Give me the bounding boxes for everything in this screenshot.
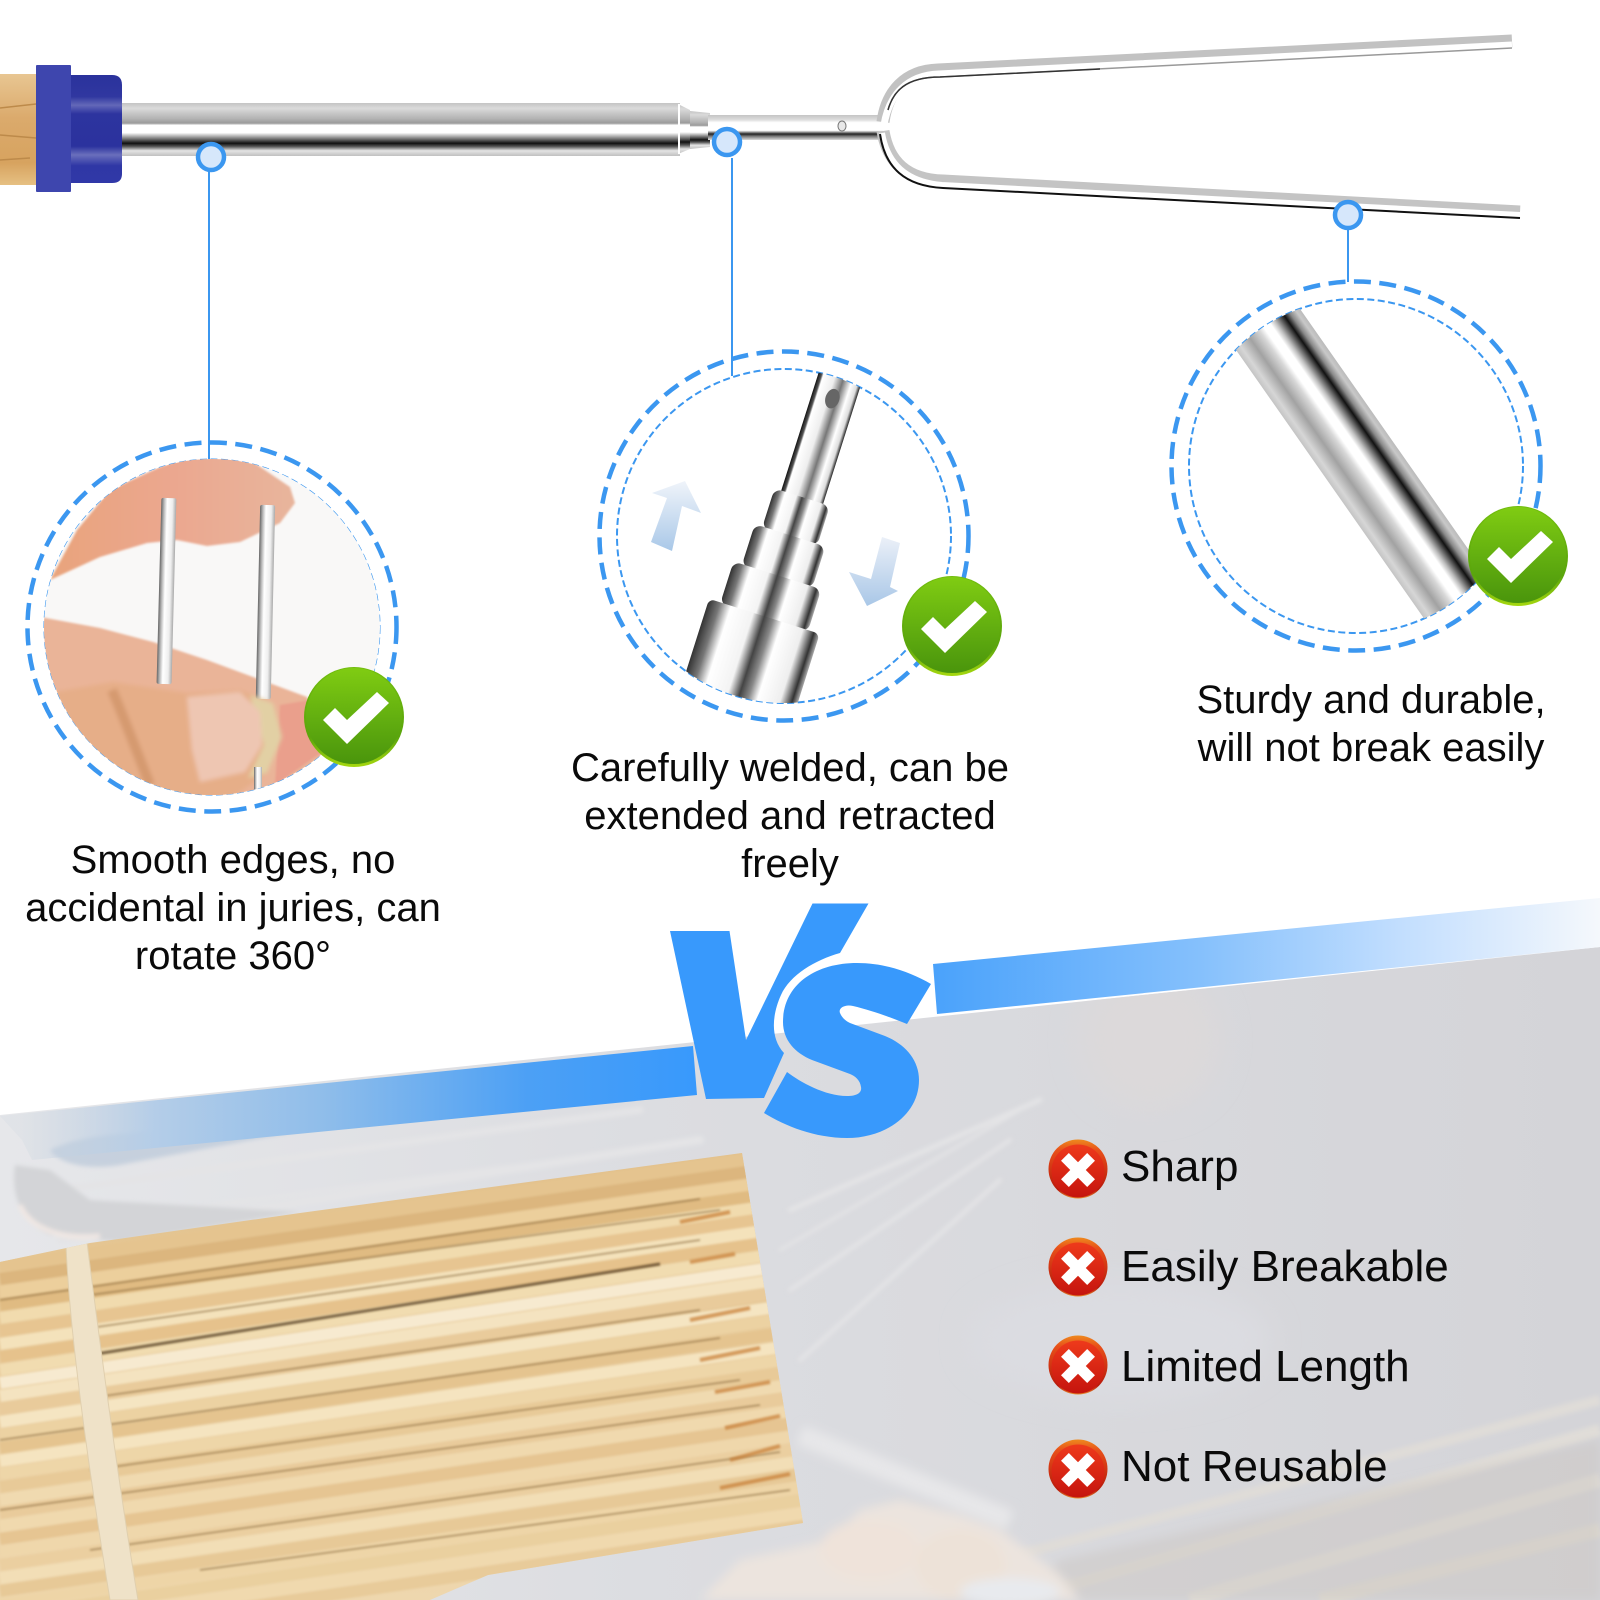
panel: smooth edges photo [28, 442, 404, 812]
white rule along the background edge [0, 945, 1600, 1113]
text: smooth edges: rotate 360° [135, 934, 331, 978]
text: carefully welded: Carefully welded, can be [571, 746, 1009, 790]
callout dot: middle [714, 129, 740, 155]
callout line: right [1347, 230, 1349, 282]
text: smooth edges: Smooth edges, no [71, 838, 395, 882]
icon: green check [1468, 506, 1568, 606]
icon: green check [902, 576, 1002, 676]
panel: welded joint photo [600, 352, 1002, 729]
icon: green check [304, 667, 404, 767]
telescoping joint [686, 372, 860, 703]
list item: not reusable [1048, 1440, 1388, 1498]
icon: red cross [1048, 1238, 1108, 1296]
list item: not reusable: Not Reusable [1121, 1442, 1388, 1491]
icon: red cross [1048, 1140, 1108, 1198]
text: sturdy and durable: Sturdy and durable, [1196, 678, 1546, 722]
hand holding the prongs [40, 450, 380, 810]
band around the skewers [66, 1242, 138, 1600]
photo: bamboo skewer bundle [0, 1140, 830, 1600]
text: sturdy and durable: will not break easily [1197, 726, 1544, 770]
rolling fork: telescoping shaft [120, 103, 883, 156]
text: smooth edges: accidental in juries, can [25, 886, 441, 930]
callout dot: left [198, 144, 224, 170]
VS emblem [670, 904, 931, 1138]
rolling fork: two prongs [880, 41, 1520, 218]
callout line: left [208, 171, 210, 459]
arrow: retract [849, 537, 900, 606]
list item: sharp [1048, 1140, 1238, 1198]
left blue bar [0, 1046, 697, 1160]
text: carefully welded: freely [741, 842, 839, 886]
rolling fork: blue collar [36, 65, 122, 192]
rolling fork: wooden handle [0, 74, 37, 185]
right blue bar [933, 898, 1600, 1014]
list item: limited length [1048, 1336, 1410, 1394]
icon: red cross [1048, 1336, 1108, 1394]
list item: easily breakable [1048, 1238, 1449, 1296]
callout line: middle [731, 158, 733, 376]
panel: blurred barbecue photo background [0, 940, 1600, 1600]
icon: red cross [1048, 1440, 1108, 1498]
list item: sharp: Sharp [1121, 1142, 1238, 1191]
steel rod closeup [1236, 308, 1476, 618]
panel: sturdy prong photo [1172, 273, 1568, 677]
text: carefully welded: extended and retracted [584, 794, 996, 838]
list item: easily breakable: Easily Breakable [1121, 1242, 1449, 1291]
arrow: extend [651, 481, 701, 551]
list item: limited length: Limited Length [1121, 1342, 1410, 1391]
callout dot: right [1335, 202, 1361, 228]
